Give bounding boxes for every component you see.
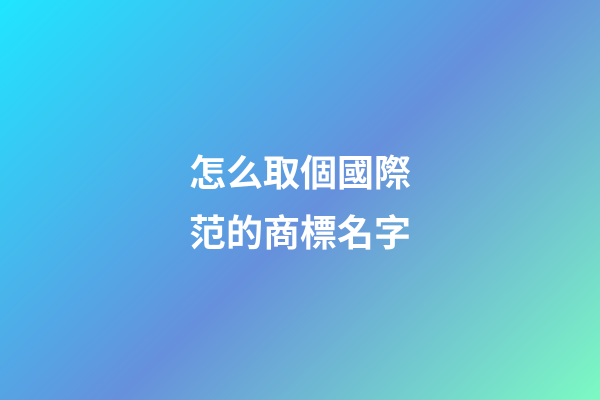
title [189, 153, 411, 254]
title: 范的商標名字 [189, 213, 411, 254]
title: 怎么取個國際 [189, 153, 411, 194]
